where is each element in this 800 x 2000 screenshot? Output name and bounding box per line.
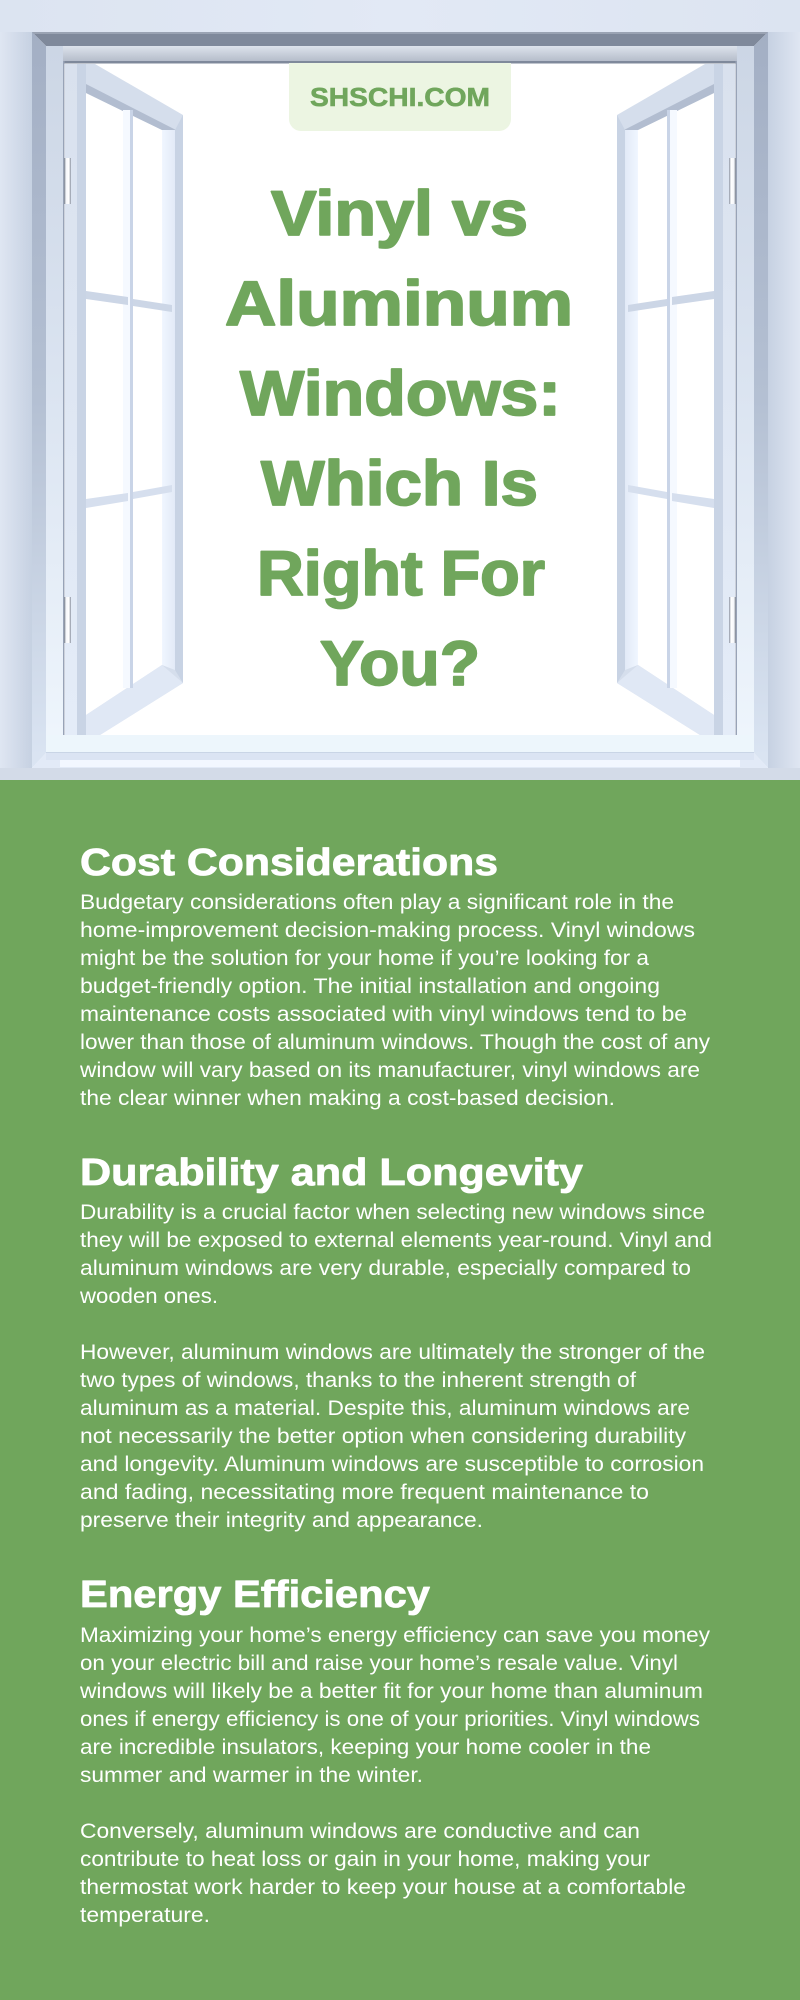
paragraph: aluminum strength: and fading, necessitating more frequent maintenance to [80, 1480, 649, 1504]
title: Windows: [240, 359, 561, 429]
paragraph: cost: lower than those of aluminum windows. Though the cost of any [80, 1030, 710, 1054]
paragraph: cost: budget-friendly option. The initial installation and ongoing [80, 974, 660, 998]
paragraph: aluminum strength: aluminum as a material. Despite this, aluminum windows are [80, 1396, 690, 1420]
heading: cost considerations: Cost Considerations [80, 842, 498, 884]
paragraph: durability intro: aluminum windows are very durable, especially compared to [80, 1256, 691, 1280]
title: Aluminum [225, 269, 573, 339]
frame reveal [32, 32, 768, 768]
right open sash [617, 64, 736, 735]
section: durability and longevity [79, 1152, 712, 1532]
background: green content panel [0, 780, 800, 2000]
paragraph: cost: the clear winner when making a cost-based decision. [80, 1086, 615, 1110]
paragraph: aluminum conductivity: temperature. [80, 1903, 210, 1927]
brand badge: SHSCHI.COM [310, 82, 490, 112]
paragraph: cost: might be the solution for your home if you’re looking for a [80, 946, 649, 970]
paragraph: cost: home-improvement decision-making process. Vinyl windows [80, 918, 695, 942]
paragraph: vinyl insulation: Maximizing your home’s energy efficiency can save you money [80, 1623, 710, 1647]
title [225, 179, 573, 699]
outer frame [0, 0, 800, 780]
title: Which Is [261, 449, 538, 519]
paragraph: aluminum conductivity: Conversely, aluminum windows are conductive and can [80, 1819, 640, 1843]
section: cost considerations [79, 842, 710, 1110]
paragraph: cost: maintenance costs associated with vinyl windows tend to be [80, 1002, 687, 1026]
heading: durability and longevity: Durability and Longevity [80, 1152, 583, 1194]
heading: energy efficiency: Energy Efficiency [80, 1574, 430, 1616]
paragraph: aluminum conductivity: thermostat work harder to keep your house at a comfortable [80, 1875, 686, 1899]
paragraph: vinyl insulation: windows will likely be a better fit for your home than aluminum [79, 1679, 703, 1703]
left open sash [64, 64, 183, 735]
inner casing [46, 46, 754, 753]
window photo illustration [0, 0, 800, 780]
paragraph: aluminum conductivity [80, 1819, 686, 1927]
paragraph: vinyl insulation [79, 1623, 710, 1787]
paragraph: aluminum strength: and longevity. Aluminum windows are susceptible to corrosion [80, 1452, 704, 1476]
paragraph: aluminum strength: not necessarily the better option when considering durability [80, 1424, 686, 1448]
title: Right For [257, 539, 545, 609]
section: energy efficiency [79, 1574, 710, 1927]
paragraph: aluminum strength: However, aluminum windows are ultimately the stronger of the [80, 1340, 705, 1364]
title: Vinyl vs [271, 179, 528, 249]
paragraph: cost: Budgetary considerations often play a significant role in the [80, 890, 674, 914]
brand badge [289, 63, 511, 131]
paragraph: aluminum strength: preserve their integrity and appearance. [80, 1508, 483, 1532]
paragraph: durability intro: wooden ones. [79, 1284, 218, 1308]
paragraph: durability intro: they will be exposed to external elements year-round. Vinyl and [80, 1228, 712, 1252]
paragraph: aluminum strength: two types of windows, thanks to the inherent strength of [80, 1368, 636, 1392]
paragraph: cost [79, 890, 710, 1110]
paragraph: vinyl insulation: on your electric bill and raise your home’s resale value. Vinyl [80, 1651, 678, 1675]
paragraph: vinyl insulation: ones if energy efficiency is one of your priorities. Vinyl windows [80, 1707, 700, 1731]
paragraph: vinyl insulation: are incredible insulators, keeping your home cooler in the [80, 1735, 651, 1759]
title: You? [320, 629, 480, 699]
paragraph: cost: window will vary based on its manufacturer, vinyl windows are [79, 1058, 700, 1082]
paragraph: aluminum conductivity: contribute to heat loss or gain in your home, making your [80, 1847, 650, 1871]
paragraph: aluminum strength [80, 1340, 705, 1532]
paragraph: durability intro [79, 1200, 712, 1308]
paragraph: durability intro: Durability is a crucial factor when selecting new windows since [80, 1200, 705, 1224]
paragraph: vinyl insulation: summer and warmer in the winter. [80, 1763, 423, 1787]
